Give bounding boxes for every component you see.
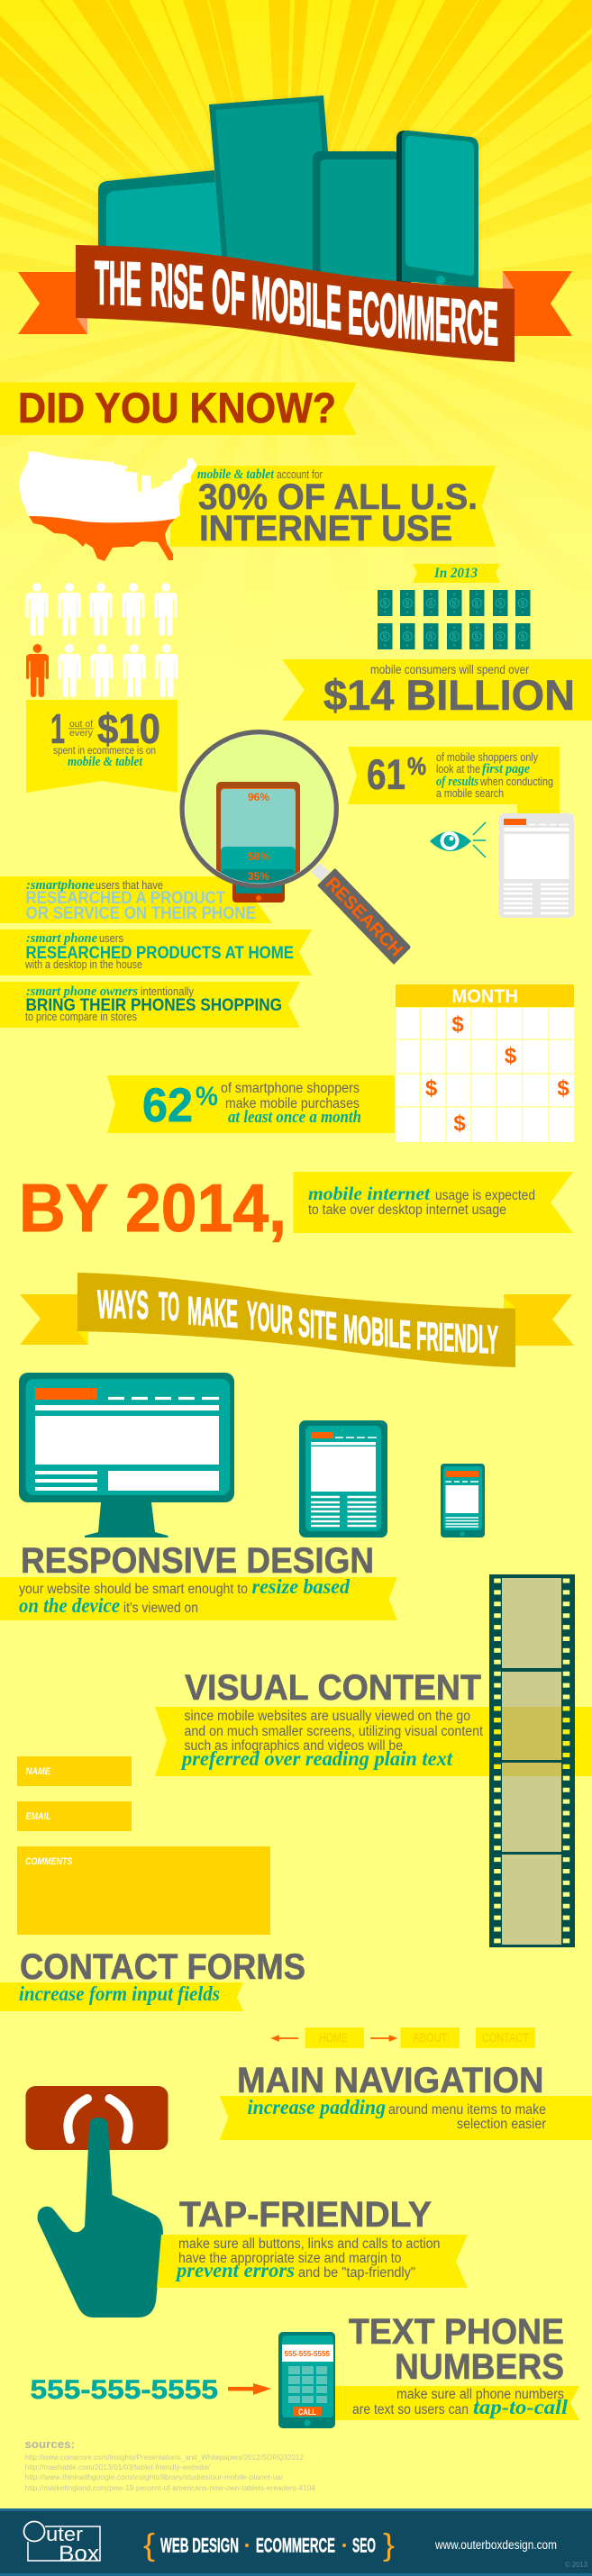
- services tagline: WEB DESIGN: [160, 2535, 239, 2556]
- tap-friendly heading: TAP-FRIENDLY: [179, 2195, 432, 2235]
- calendar: $: [453, 1111, 466, 1136]
- money bills: $: [383, 632, 387, 641]
- calendar: $: [557, 1076, 569, 1101]
- website url: www.outerboxdesign.com: [434, 2537, 557, 2552]
- banner: tap-friendly: and be "tap-friendly": [298, 2265, 415, 2281]
- banner: researched at home: [0, 930, 312, 975]
- banner: researched at home: :smart phone: [26, 931, 97, 946]
- sources: [25, 2437, 316, 2492]
- logo: Outer Box: Box: [59, 2542, 99, 2566]
- responsive design heading: RESPONSIVE DESIGN: [21, 1541, 374, 1581]
- banner: tap-friendly: [157, 2235, 468, 2288]
- ribbon heading: MAKE: [187, 1289, 238, 1337]
- tablet in lens: 58%: [248, 850, 269, 863]
- icon: pointing hand: [38, 2118, 163, 2317]
- portrait tablet: [313, 151, 401, 304]
- ribbon heading: MOBILE: [343, 1307, 411, 1357]
- banner: researched a product: [0, 876, 272, 923]
- banner: tap-friendly: make sure all buttons, links and calls to action: [178, 2236, 440, 2252]
- money bills: $: [452, 600, 457, 607]
- banner: 62%: at least once a month: [228, 1108, 361, 1127]
- banner: bring phones shopping: intentionally: [141, 984, 194, 998]
- banner: 61% first page: of results: [436, 775, 478, 789]
- banner: 14 billion: [282, 659, 592, 721]
- banner: responsive design: it's viewed on: [123, 1601, 198, 1616]
- banner: 1 out of every $10: spent in ecommerce is on: [53, 746, 156, 757]
- tilted tablet: [209, 95, 340, 297]
- devices illustration: [98, 95, 478, 304]
- banner: 30% of internet use: [170, 466, 496, 549]
- icon: call phone: [278, 2332, 335, 2428]
- title: THE: [95, 249, 141, 319]
- arrow: right: [370, 2036, 396, 2041]
- title: [95, 249, 498, 358]
- logo: Outer Box: uter: [46, 2523, 83, 2545]
- money bills: $: [452, 632, 457, 641]
- banner: 61% first page: when conducting: [479, 775, 553, 788]
- calendar: $: [425, 1076, 438, 1101]
- banner: mobile internet: mobile internet: [308, 1183, 431, 1204]
- banner: bring phones shopping: BRING THEIR PHONES SHOPPING: [25, 995, 282, 1015]
- banner: tap-friendly: have the appropriate size and margin to: [178, 2251, 402, 2266]
- banner: visual content: [155, 1707, 592, 1776]
- banner: visual content: such as infographics and videos will be: [184, 1738, 403, 1754]
- banner: 61% first page: 61: [367, 750, 405, 798]
- banner: responsive design: on the device: [19, 1594, 120, 1617]
- banner: 61% first page: a mobile search: [436, 786, 504, 800]
- tablet in lens: 35%: [248, 870, 269, 883]
- banner: contact forms: increase form input fields: [19, 1982, 220, 2005]
- money bills: $: [498, 600, 503, 607]
- banner: bring phones shopping: to price compare in stores: [25, 1010, 137, 1023]
- banner: researched at home: with a desktop in the house: [24, 957, 142, 971]
- phone below lens: [232, 865, 285, 903]
- tablet in lens: 96%: [248, 791, 269, 803]
- banner: main navigation: selection easier: [457, 2117, 546, 2132]
- ribbon heading: [97, 1283, 498, 1363]
- footer: [0, 2508, 592, 2576]
- search results page mock: [499, 813, 574, 918]
- navigation menu mock: [272, 2027, 535, 2048]
- banner: 62%: make mobile purchases: [225, 1096, 360, 1111]
- money bills: $: [521, 600, 525, 607]
- banner: 14 billion: $14 BILLION: [323, 671, 575, 719]
- banner: 61% first page: [348, 747, 560, 821]
- text phone numbers heading: [349, 2312, 564, 2387]
- banner: visual content: preferred over reading plain text: [180, 1747, 453, 1770]
- banner: phone numbers: tap-to-call: [473, 2396, 569, 2418]
- title ribbon: [18, 245, 572, 362]
- money bills: $: [429, 632, 433, 641]
- banner: researched at home: RESEARCHED PRODUCTS AT HOME: [25, 943, 294, 963]
- banner: researched a product: :smartphone: [26, 878, 95, 893]
- banner: researched a product: users that have: [96, 878, 163, 892]
- banner: bring phones shopping: :smart phone owners: [26, 984, 138, 999]
- sources: http://www.thinkwithgoogle.com/insights/library/studies/our-mobile-planet-us/: [25, 2473, 284, 2481]
- banner: 30% of internet use: account for: [277, 467, 323, 481]
- icon: eye: [430, 822, 486, 857]
- navigation menu mock: CONTACT: [482, 2030, 529, 2045]
- name field: NAME: [25, 1766, 51, 1777]
- banner: 61% first page: first page: [482, 762, 530, 776]
- banner: mobile internet: usage is expected: [435, 1188, 535, 1203]
- people icons: [25, 583, 178, 697]
- banner: 1 out of every $10: mobile & tablet: [68, 755, 143, 769]
- banner: mobile internet: [294, 1172, 573, 1233]
- banner: 62%: %: [196, 1082, 218, 1111]
- icon: desktop monitor: [19, 1373, 234, 1537]
- in 2013 tag: In 2013: [433, 566, 478, 581]
- money bills: $: [475, 600, 479, 607]
- by 2014 heading: BY 2014,: [19, 1170, 287, 1246]
- text phone numbers heading: TEXT PHONE: [349, 2312, 564, 2352]
- money bills: $: [429, 600, 433, 607]
- banner: 61% first page: of mobile shoppers only: [436, 750, 538, 764]
- banner: 1 out of every $10: 1: [50, 705, 65, 752]
- money bills: $: [521, 632, 525, 641]
- services tagline: SEO: [352, 2535, 376, 2556]
- title: OF: [212, 257, 245, 329]
- banner: 62%: [107, 1075, 395, 1133]
- money bills: $: [475, 632, 479, 641]
- calendar: $: [505, 1044, 517, 1068]
- sources: sources:: [25, 2437, 75, 2451]
- money bills: $: [498, 632, 503, 641]
- services tagline: }: [383, 2528, 395, 2562]
- handle: RESEARCH: [322, 874, 406, 960]
- magnifying glass: [182, 732, 411, 964]
- banner: researched a product: RESEARCHED A PRODUCT: [25, 888, 225, 908]
- icon: tap button: [25, 2086, 168, 2150]
- ribbon heading: TO: [159, 1284, 179, 1329]
- icon: call phone: 555-555-5555: [285, 2350, 331, 2358]
- banner: visual content: since mobile websites are usually viewed on the go: [184, 1709, 470, 1724]
- banner: bring phones shopping: [0, 982, 300, 1028]
- arrow: left: [272, 2036, 298, 2041]
- lens: [182, 732, 336, 886]
- email field: EMAIL: [25, 1811, 51, 1822]
- ways ribbon: [20, 1273, 574, 1367]
- calendar: MONTH: [452, 986, 518, 1007]
- banner: 30% of internet use: 30% OF ALL U.S.: [198, 477, 478, 517]
- contact forms heading: CONTACT FORMS: [20, 1947, 305, 1987]
- visual content heading: VISUAL CONTENT: [185, 1668, 481, 1708]
- calendar: [396, 984, 574, 1142]
- banner: 14 billion: mobile consumers will spend over: [370, 662, 529, 676]
- banner: researched at home: users: [99, 931, 123, 945]
- logo: Outer Box: [23, 2522, 100, 2566]
- title: MOBILE: [251, 263, 342, 343]
- form fields: [17, 1756, 270, 1935]
- smartphone: [396, 131, 478, 288]
- money bills: [378, 590, 530, 649]
- money bills: $: [405, 600, 410, 607]
- calendar: $: [451, 1012, 464, 1037]
- landscape tablet: [98, 170, 225, 297]
- title: RISE: [150, 250, 204, 322]
- copyright: © 2013: [565, 2561, 588, 2569]
- phone number text: 555-555-5555: [31, 2375, 218, 2405]
- services tagline: [143, 2528, 395, 2562]
- icon: call phone: CALL: [298, 2408, 316, 2417]
- banner: researched a product: OR SERVICE ON THEIR PHONE: [25, 903, 256, 923]
- services tagline: {: [143, 2528, 155, 2562]
- comments field: [17, 1846, 270, 1935]
- icon: tablet layout: [299, 1420, 387, 1537]
- icon: film strip: [489, 1574, 575, 1947]
- sources: http://mashable.com/2013/01/03/tablet-friendly-website/: [25, 2463, 211, 2472]
- banner: 30% of internet use: mobile & tablet: [197, 467, 275, 482]
- banner: responsive design: resize based: [252, 1575, 350, 1598]
- banner: phone numbers: [335, 2386, 579, 2420]
- in 2013 tag: [413, 564, 500, 583]
- icon: phone layout: [441, 1464, 485, 1537]
- arrow: number to phone: [228, 2383, 271, 2395]
- ribbon heading: YOUR: [247, 1293, 293, 1343]
- ribbon heading: SITE: [298, 1301, 337, 1349]
- banner: 1 out of every $10: out of: [69, 720, 93, 730]
- money bills: $: [405, 632, 410, 641]
- sources: http://www.comscore.com/Insights/Presentations_and_Whitepapers/2012/SORQ32012: [25, 2454, 305, 2462]
- banner: mobile internet: to take over desktop internet usage: [308, 1202, 506, 1218]
- banner: tap-friendly: prevent errors: [175, 2259, 295, 2281]
- sources: http://marketingland.com/pew-19-percent-of-americans-now-own-tablets-ereaders-4104: [25, 2484, 316, 2492]
- banner: main navigation: around menu items to make: [388, 2102, 546, 2118]
- name field: [17, 1756, 132, 1786]
- email field: [17, 1801, 132, 1831]
- banner: 61% first page: %: [407, 752, 426, 780]
- banner: 1 out of every $10: $10: [97, 705, 160, 752]
- main navigation heading: MAIN NAVIGATION: [237, 2061, 544, 2100]
- tablet in lens: [216, 782, 300, 884]
- banner: 1 out of every $10: every: [69, 729, 93, 739]
- comments field: COMMENTS: [25, 1856, 73, 1867]
- navigation menu mock: ABOUT: [413, 2030, 448, 2045]
- did you know banner: DID YOU KNOW?: [18, 384, 336, 431]
- banner: visual content: and on much smaller screens, utilizing visual content: [184, 1724, 484, 1739]
- banner: 62%: 62: [142, 1079, 193, 1132]
- banner: 62%: of smartphone shoppers: [221, 1081, 360, 1096]
- ribbon heading: WAYS: [97, 1283, 149, 1328]
- banner: 1 out of every $10: [26, 700, 178, 793]
- banner: main navigation: [220, 2096, 592, 2140]
- icon: US map: [19, 451, 197, 561]
- services tagline: ECOMMERCE: [256, 2535, 335, 2556]
- banner: phone numbers: are text so users can: [352, 2402, 469, 2417]
- navigation menu mock: HOME: [319, 2030, 348, 2045]
- banner: responsive design: [0, 1575, 397, 1620]
- money bills: $: [383, 600, 387, 607]
- banner: 61% first page: look at the: [436, 762, 480, 776]
- banner: main navigation: increase padding: [247, 2096, 386, 2118]
- banner: 30% of internet use: INTERNET USE: [199, 509, 452, 549]
- text phone numbers heading: NUMBERS: [395, 2347, 564, 2387]
- banner: phone numbers: make sure all phone numbers: [396, 2387, 564, 2402]
- banner: responsive design: your website should be smart enought to: [19, 1582, 248, 1597]
